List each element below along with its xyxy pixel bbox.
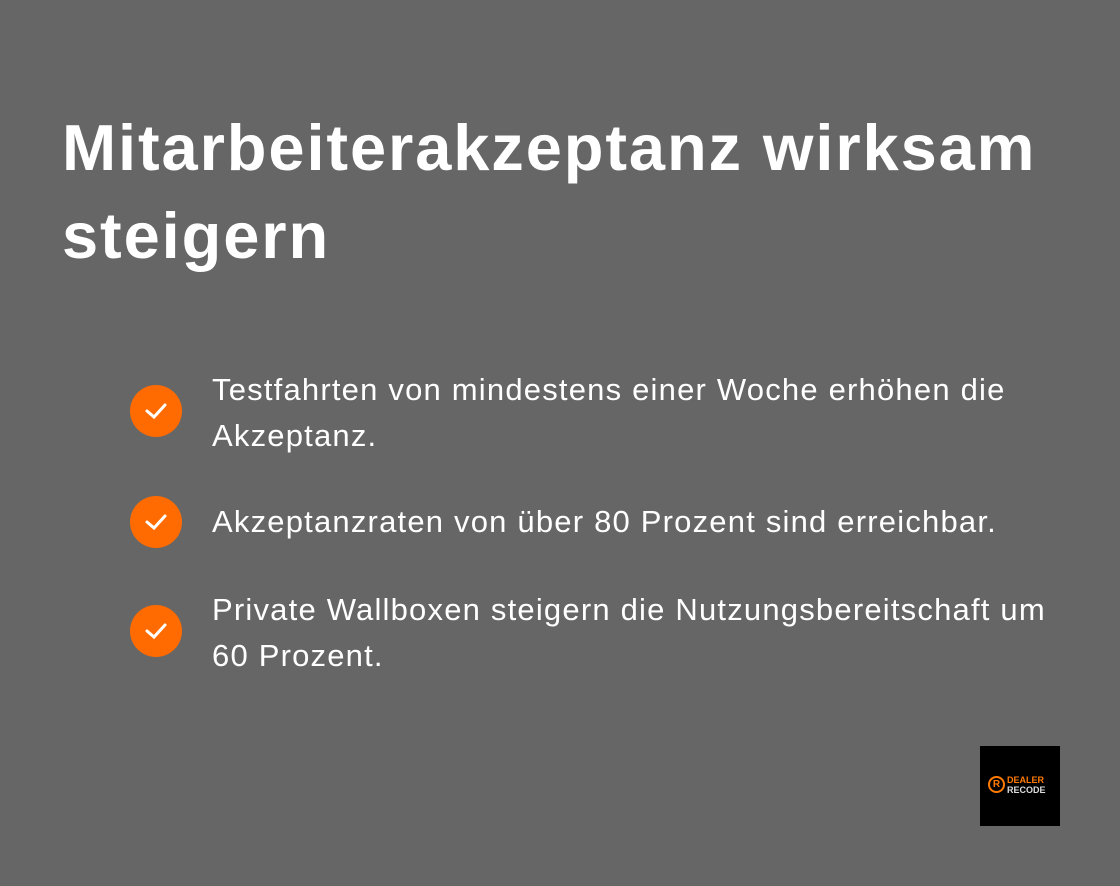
logo text — [1007, 775, 1046, 795]
text 3: Private Wallboxen steigern die Nutzungsbereitschaft um — [212, 592, 1046, 627]
title — [62, 111, 1036, 272]
logo text: DEALER — [1007, 775, 1044, 785]
text 2: Akzeptanzraten von über 80 Prozent sind erreichbar. — [212, 504, 997, 539]
text 3 — [212, 592, 1046, 673]
logo icon — [988, 776, 1005, 793]
item 2 — [130, 496, 997, 548]
item 3 — [130, 592, 1046, 673]
icon: check — [130, 605, 182, 657]
logo — [980, 746, 1060, 826]
icon: check — [130, 385, 182, 437]
text 1: Akzeptanz. — [212, 418, 377, 453]
icon: check — [130, 496, 182, 548]
logo text: RECODE — [1007, 785, 1046, 795]
item 1 — [130, 372, 1006, 453]
text 1 — [212, 372, 1006, 453]
logo icon: R — [993, 779, 1000, 790]
title: Mitarbeiterakzeptanz wirksam — [62, 111, 1036, 184]
text 3: 60 Prozent. — [212, 638, 384, 673]
title: steigern — [62, 199, 330, 272]
text 1: Testfahrten von mindestens einer Woche erhöhen die — [212, 372, 1006, 407]
